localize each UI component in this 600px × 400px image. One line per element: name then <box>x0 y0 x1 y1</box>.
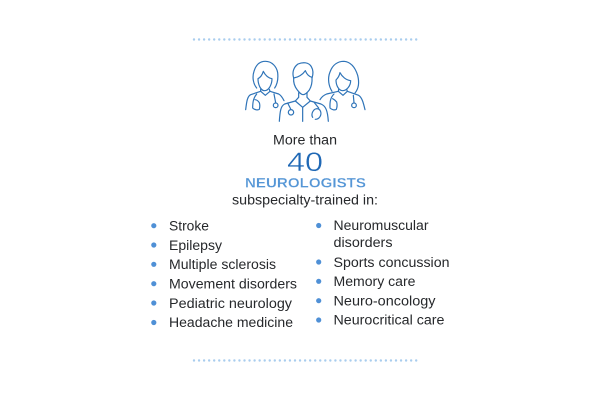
bullet item: neuromuscular disorders <box>316 218 429 250</box>
bullet item: stroke <box>151 218 209 234</box>
bullet item: neuromuscular disorders: disorders <box>334 235 393 250</box>
bullet item: headache medicine: Headache medicine <box>169 315 293 330</box>
icon: centre male doctor <box>279 63 328 121</box>
bullet item: neuro-oncology: Neuro-oncology <box>334 293 436 308</box>
list: right column <box>316 218 450 328</box>
subheading: subspecialty-trained in: subspecialty-trained in: <box>232 192 378 208</box>
bullet item: multiple sclerosis: Multiple sclerosis <box>169 257 276 272</box>
icon: right female doctor <box>320 61 365 110</box>
heading: neurologists: NEUROLOGISTS <box>245 176 366 190</box>
bullet item: memory care: Memory care <box>334 274 416 289</box>
bullet item: sports concussion: Sports concussion <box>334 255 450 270</box>
icon: left female doctor <box>246 61 284 110</box>
list: left column <box>151 218 297 330</box>
bullet item: pediatric neurology: Pediatric neurology <box>169 296 292 311</box>
bullet item: neurocritical care: Neurocritical care <box>334 313 444 328</box>
heading: more than: More than <box>273 132 337 148</box>
bullet item: stroke: Stroke <box>169 218 209 234</box>
icon: three doctors with stethoscopes <box>246 61 365 121</box>
bullet item: epilepsy: Epilepsy <box>169 238 222 253</box>
bullet item: movement disorders: Movement disorders <box>169 276 297 292</box>
big number: 40: 40 <box>287 147 323 177</box>
bullet item: neuromuscular disorders: Neuromuscular <box>334 218 429 233</box>
